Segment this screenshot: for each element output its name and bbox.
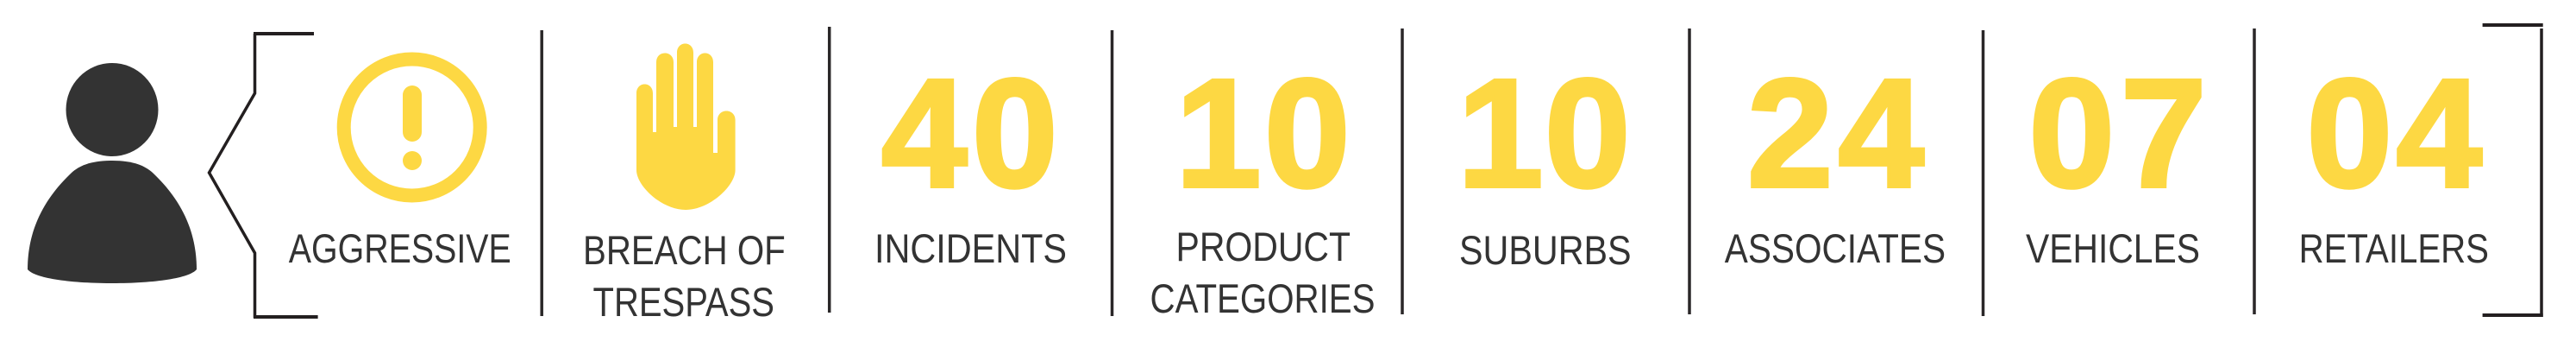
panel: retailers — [2299, 47, 2489, 271]
panel: breach of trespass — [583, 43, 786, 325]
label: aggressive: AGGRESSIVE — [289, 225, 511, 271]
label: product categories — [1150, 224, 1375, 321]
number: 07: 07 — [2028, 47, 2207, 219]
number: 10: 10 — [1175, 47, 1351, 219]
icon: person — [28, 63, 197, 283]
number: 24: 24 — [1747, 47, 1924, 219]
label: breach of trespass — [583, 227, 786, 325]
number: 40: 40 — [881, 47, 1058, 219]
panel: aggressive — [289, 59, 511, 271]
panel: vehicles — [2026, 47, 2207, 271]
right bracket — [2483, 25, 2543, 317]
icon: raised hand — [636, 43, 736, 210]
label: retailers: RETAILERS — [2299, 225, 2489, 271]
number: 04: 04 — [2307, 47, 2482, 219]
label: associates: ASSOCIATES — [1725, 225, 1946, 271]
panel: product categories — [1150, 47, 1375, 321]
label: product categories: CATEGORIES — [1150, 275, 1375, 321]
left bracket — [209, 34, 318, 318]
label: vehicles: VEHICLES — [2026, 225, 2200, 271]
label: breach of trespass: TRESPASS — [593, 279, 774, 325]
label: incidents: INCIDENTS — [874, 225, 1067, 271]
panel: incidents — [874, 47, 1067, 271]
label: suburbs: SUBURBS — [1459, 227, 1632, 273]
label: product categories: PRODUCT — [1176, 224, 1351, 269]
number: 10: 10 — [1457, 47, 1631, 219]
icon: exclamation in circle — [344, 59, 480, 195]
label: breach of trespass: BREACH OF — [583, 227, 786, 273]
panel: associates — [1725, 47, 1946, 271]
panel: suburbs — [1457, 47, 1632, 273]
